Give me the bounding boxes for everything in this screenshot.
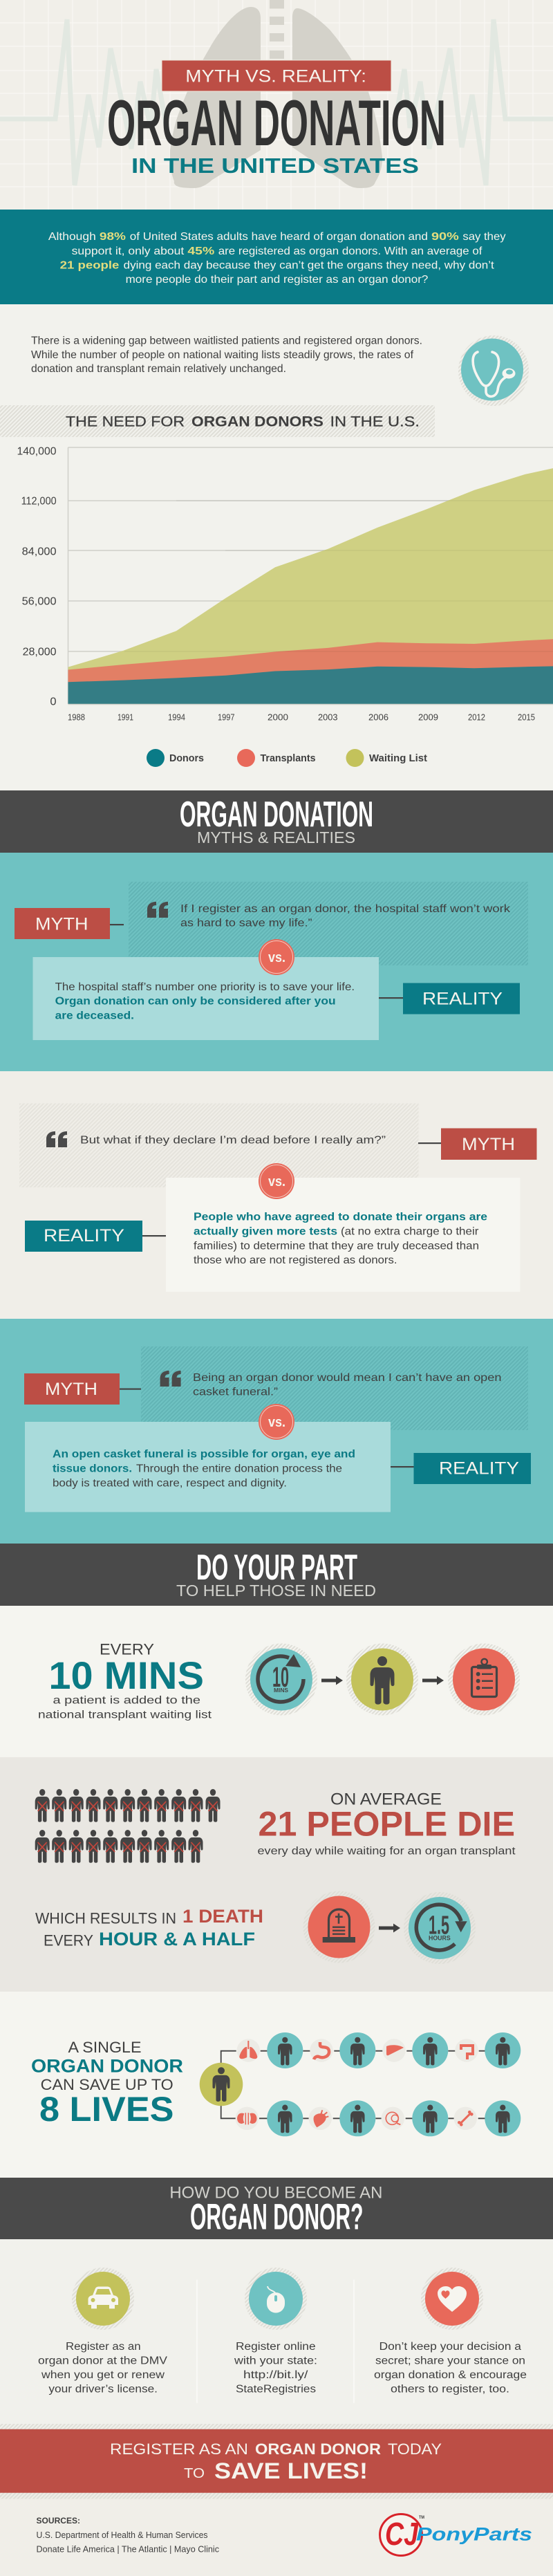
text block: widening gap <box>31 335 422 375</box>
panel: intro statistics band: support it, only about <box>72 245 185 257</box>
legend: Waiting List <box>369 753 427 764</box>
heading: the need for organ donors: ORGAN DONORS <box>191 414 324 430</box>
stat: one death every hour and a half <box>35 1906 263 1949</box>
myth label <box>418 1129 536 1160</box>
icon: ten minute clock: 10 <box>272 1661 289 1693</box>
stat: 10 mins: a patient is added to the <box>53 1694 200 1707</box>
icon: kidneys <box>236 2107 259 2130</box>
icon: clipboard <box>448 1643 520 1715</box>
recipients row 2 <box>267 2100 521 2136</box>
reality panel: tissue donors. <box>53 1463 132 1474</box>
myth label <box>15 908 124 939</box>
panel: save up to 8 lives <box>0 1992 553 2178</box>
myth label: MYTH <box>462 1136 515 1154</box>
call to action <box>0 2424 553 2499</box>
step: online: http://bit.ly/ <box>243 2369 308 2381</box>
recipients row 1 <box>267 2032 521 2068</box>
series: transplants <box>68 639 553 704</box>
stat: one death every hour and a half: EVERY <box>44 1932 93 1949</box>
ecg line left <box>0 19 166 185</box>
pictogram: 21 crossed-out people <box>35 1789 220 1863</box>
reality panel: families) to determine that they are truly deceased than <box>194 1241 479 1252</box>
reality label: REALITY <box>422 990 503 1008</box>
footer background <box>0 2492 553 2576</box>
reality panel <box>33 957 379 1040</box>
icon: bone <box>454 2107 477 2130</box>
series: waiting list <box>68 468 553 704</box>
myth quote panel: If I register as an organ donor, the hospital staff won’t work <box>180 903 511 915</box>
reality panel: The hospital staff’s number one priority is to save your life. <box>55 981 355 993</box>
area chart <box>17 445 553 722</box>
stat: 21 people die <box>257 1790 516 1857</box>
stat: 8 lives <box>31 2039 183 2129</box>
reality label <box>391 1453 531 1484</box>
icon: stomach <box>310 2039 333 2062</box>
x axis labels: 1988 <box>68 712 85 722</box>
step: DMV: organ donor at the DMV <box>38 2355 168 2366</box>
logo: CJ Pony Parts: PonyParts <box>416 2524 532 2545</box>
heading band: do your part: TO HELP THOSE IN NEED <box>176 1582 376 1600</box>
icon: tombstone <box>303 1891 375 1963</box>
trachea <box>270 0 284 83</box>
y axis labels: 56,000 <box>22 596 57 607</box>
legend <box>147 749 427 767</box>
logo: CJ Pony Parts: TM <box>419 2516 424 2520</box>
panel: intro statistics band: 90% <box>431 231 459 243</box>
reality panel: are deceased. <box>55 1010 134 1022</box>
y axis labels: 0 <box>50 696 57 708</box>
step: share decision: secret; share your stance on <box>375 2355 525 2366</box>
icon: eye <box>382 2107 404 2130</box>
left lung <box>170 7 261 188</box>
x axis labels: 2015 <box>518 712 535 722</box>
step: DMV <box>38 2268 168 2396</box>
panel: myth 1 <box>0 853 553 1071</box>
subtitle: IN THE UNITED STATES <box>131 154 419 178</box>
panel: intro statistics band: 45% <box>187 245 214 257</box>
myth quote panel <box>129 882 528 965</box>
x axis labels: 2000 <box>268 712 288 722</box>
reality panel <box>25 1422 391 1512</box>
myth label: MYTH <box>35 916 88 934</box>
myth label: MYTH <box>45 1380 97 1399</box>
step: share decision: organ donation & encourage <box>374 2369 527 2381</box>
stat: 8 lives: A SINGLE <box>68 2039 141 2056</box>
stat: 8 lives: CAN SAVE UP TO <box>41 2076 174 2093</box>
panel: every 10 mins <box>0 1606 553 1757</box>
ecg line right <box>395 19 553 185</box>
legend: Transplants <box>260 753 315 764</box>
arrow <box>422 1676 444 1685</box>
heading: the need for organ donors: IN THE U.S. <box>330 414 420 430</box>
text block: widening gap: There is a widening gap between waitlisted patients and registered organ donors. <box>31 335 422 347</box>
stat: one death every hour and a half: HOUR & A HALF <box>99 1929 255 1949</box>
x axis labels <box>68 712 535 722</box>
icon: 1.5 hour clock: 1.5 <box>429 1911 449 1940</box>
vs badge: vs. <box>268 1415 285 1430</box>
sources: U.S. Department of Health & Human Services <box>36 2530 207 2540</box>
myth quote panel: But what if they declare I’m dead before I really am?” <box>80 1134 386 1147</box>
y axis labels: 28,000 <box>23 646 57 658</box>
panel: myth 3 <box>0 1319 553 1544</box>
panel: intro statistics band: of United States adults have heard of organ donation and <box>130 231 428 243</box>
step: online: Register online <box>236 2341 316 2353</box>
stat: 21 people die: 21 PEOPLE DIE <box>259 1805 515 1844</box>
step: online: StateRegistries <box>236 2383 316 2396</box>
call to action: ORGAN DONOR <box>255 2440 381 2458</box>
reality label: REALITY <box>44 1227 124 1245</box>
icon: 1.5 hour clock: HOURS <box>429 1935 451 1942</box>
sources <box>36 2517 219 2555</box>
panel: intro statistics band: more people do their part and register as an organ donor? <box>126 274 428 286</box>
panel: intro statistics band: Although <box>48 231 96 243</box>
heading band: organ donation myths and realities: ORGAN DONATION <box>180 795 373 835</box>
legend: Donors <box>169 753 204 764</box>
y axis labels: 112,000 <box>21 495 57 508</box>
logo: CJ Pony Parts: CJ <box>385 2516 419 2552</box>
stat: one death every hour and a half: WHICH RESULTS IN <box>35 1910 176 1927</box>
heading: the need for organ donors: THE NEED FOR <box>66 414 185 430</box>
y axis labels: 84,000 <box>22 546 57 557</box>
call to action: TO <box>184 2466 205 2481</box>
panel: gap section background <box>0 304 553 790</box>
panel: ways to become a donor <box>0 2239 553 2429</box>
step: share decision: others to register, too. <box>391 2383 509 2396</box>
stat: 10 mins: EVERY <box>100 1641 154 1658</box>
reality panel: actually given more tests <box>194 1225 337 1238</box>
myth quote panel: Being an organ donor would mean I can’t have an open <box>193 1372 502 1384</box>
reality panel: body is treated with care, respect and dignity. <box>53 1477 287 1490</box>
panel: intro statistics band: say they <box>462 231 506 243</box>
vs badge <box>259 1404 294 1440</box>
step: DMV: when you get or renew <box>41 2369 165 2381</box>
banner: myth vs reality: MYTH VS. REALITY: <box>185 66 366 86</box>
myth quote panel <box>19 1104 419 1187</box>
reality label <box>25 1221 166 1252</box>
series: donors <box>68 666 553 704</box>
icon: intestine <box>455 2039 478 2062</box>
myth quote panel: as hard to save my life.” <box>180 917 312 929</box>
heading: the need for organ donors <box>0 405 435 437</box>
heading band: organ donation myths and realities: MYTHS & REALITIES <box>197 828 355 846</box>
logo: CJ Pony Parts <box>380 2514 532 2556</box>
icon: donor <box>200 2063 243 2106</box>
diagram connectors <box>221 2051 485 2118</box>
vs badge <box>259 939 294 975</box>
stat: 10 mins: 10 MINS <box>48 1653 204 1697</box>
icon: ten minute clock <box>245 1643 317 1715</box>
text block: widening gap: donation and transplant remain relatively unchanged. <box>31 363 286 375</box>
stat: 21 people die: ON AVERAGE <box>330 1790 442 1809</box>
icon: ten minute clock: MINS <box>274 1687 288 1694</box>
heading band: organ donation myths and realities <box>0 790 553 853</box>
panel: intro statistics band: 98% <box>100 231 126 243</box>
text block: widening gap: While the number of people on national waiting lists steadily grows, the rates of <box>31 349 414 361</box>
panel: intro statistics band: are registered as organ donors. With an average of <box>218 245 482 257</box>
call to action: TODAY <box>388 2440 442 2458</box>
icon: lungs <box>237 2039 260 2062</box>
x axis labels: 2009 <box>418 712 438 722</box>
right lung <box>292 8 382 188</box>
vs badge <box>259 1163 294 1199</box>
stat: 10 mins <box>38 1641 212 1721</box>
icon: 1.5 hour clock <box>404 1892 476 1964</box>
icon: stethoscope <box>458 335 529 406</box>
panel: intro statistics band: dying each day because they can’t get the organs they need, why don’t <box>124 260 494 271</box>
x axis labels: 1991 <box>118 712 133 722</box>
reality panel <box>166 1178 520 1292</box>
arrow <box>321 1676 343 1685</box>
banner: myth vs reality <box>162 60 391 91</box>
sources: Donate Life America | The Atlantic | Mayo Clinic <box>36 2545 219 2555</box>
x axis labels: 1997 <box>218 712 235 722</box>
heading band: do your part: DO YOUR PART <box>196 1548 357 1588</box>
icon: liver <box>382 2039 406 2062</box>
heading band: how do you become an organ donor: ORGAN DONOR? <box>190 2196 364 2238</box>
y axis labels: 140,000 <box>17 445 57 458</box>
icon: person on olive <box>346 1643 418 1715</box>
reality label: REALITY <box>439 1459 519 1479</box>
stat: 21 people die: every day while waiting for an organ transplant <box>257 1845 516 1857</box>
myth label <box>24 1373 141 1405</box>
panel: intro statistics band: 21 people <box>60 260 120 271</box>
vs badge: vs. <box>268 950 285 965</box>
stat: 8 lives: ORGAN DONOR <box>31 2056 183 2077</box>
icon: heart organ <box>309 2107 332 2130</box>
step: online: with your state: <box>234 2355 317 2366</box>
y axis labels <box>17 445 57 708</box>
call to action: REGISTER AS AN <box>110 2440 248 2458</box>
sources: SOURCES: <box>36 2517 80 2526</box>
step: share decision <box>374 2268 527 2396</box>
step: DMV: your driver’s license. <box>48 2383 158 2396</box>
panel: myth 2 <box>0 1071 553 1319</box>
arrow <box>379 1924 400 1932</box>
myth quote panel: casket funeral.” <box>193 1386 278 1398</box>
stat: one death every hour and a half: 1 DEATH <box>182 1906 263 1927</box>
call to action: SAVE LIVES! <box>214 2458 368 2483</box>
panel: intro statistics band <box>0 210 553 304</box>
panel: 21 people die <box>0 1757 553 1992</box>
vs badge: vs. <box>268 1174 285 1189</box>
x axis labels: 2006 <box>368 712 388 722</box>
step: online <box>234 2268 317 2396</box>
x axis labels: 2003 <box>318 712 338 722</box>
reality panel: those who are not registered as donors. <box>194 1254 397 1266</box>
reality label <box>379 983 520 1014</box>
reality panel: (at no extra charge to their <box>341 1225 479 1238</box>
panel: header <box>0 0 553 210</box>
stat: 10 mins: national transplant waiting list <box>38 1709 212 1721</box>
x axis labels: 1994 <box>168 712 185 722</box>
myth quote panel <box>141 1346 528 1430</box>
step: share decision: Don’t keep your decision a <box>379 2341 521 2353</box>
reality panel: An open casket funeral is possible for organ, eye and <box>53 1448 355 1461</box>
heading band: how do you become an organ donor <box>0 2178 553 2239</box>
stat: 8 lives: 8 LIVES <box>39 2090 174 2129</box>
heading band: do your part <box>0 1544 553 1606</box>
x axis labels: 2012 <box>468 712 485 722</box>
step: DMV: Register as an <box>66 2341 141 2353</box>
reality panel: People who have agreed to donate their organs are <box>194 1212 487 1223</box>
reality panel: Organ donation can only be considered after you <box>55 996 336 1007</box>
reality panel: Through the entire donation process the <box>136 1463 342 1474</box>
heading band: how do you become an organ donor: HOW DO YOU BECOME AN <box>169 2184 382 2202</box>
